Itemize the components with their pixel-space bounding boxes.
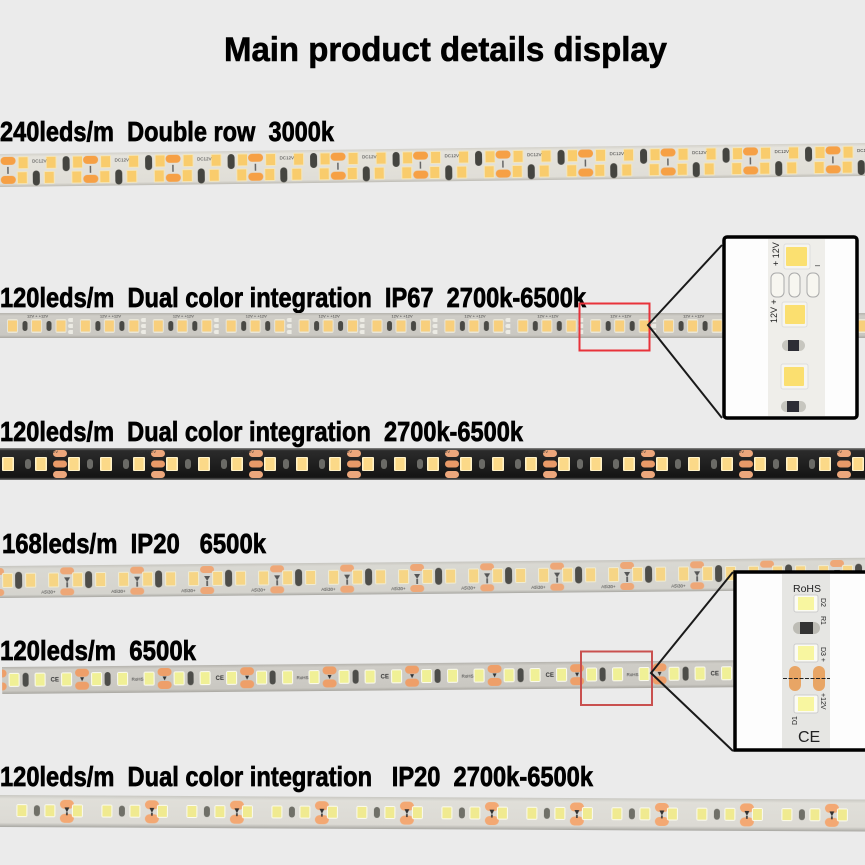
cut line <box>783 678 830 680</box>
callout strip body <box>782 574 830 748</box>
callout label D2: D2 <box>819 598 826 607</box>
strip: 120leds/m IP67 <box>0 313 865 338</box>
callout label D3: D3 + <box>819 647 826 662</box>
strip: 240leds/m double row <box>0 143 865 187</box>
callout solder pads <box>771 273 819 297</box>
callout LED 3 <box>781 364 808 389</box>
label: 120leds/m IP20 strip: 120leds/m Dual color integration IP20 2700k-6500k <box>0 761 594 792</box>
callout LED D3 <box>794 644 818 662</box>
callout resistor 2 <box>781 401 806 412</box>
arrow lines: callout 1 <box>648 245 722 418</box>
callout minus signs: – <box>815 260 820 270</box>
strip: 120leds/m 6500k <box>2 660 802 694</box>
strip: 120leds/m IP20 dual colour <box>0 795 865 832</box>
arrow lines: callout 2 <box>651 572 733 751</box>
callout LED D2 <box>794 595 818 612</box>
label: 240leds/m strip: 240leds/m Double row 3000k <box>0 116 335 147</box>
callout resistor 1 <box>782 340 805 351</box>
label: 120leds/m IP67 strip: 120leds/m Dual color integration IP67 2700k-6500k <box>0 282 587 313</box>
callout: zoom of 12V strip <box>724 237 857 418</box>
callout resistor R1 <box>793 622 820 634</box>
red highlight box 2 <box>581 652 652 705</box>
callout LED D1 <box>794 695 818 713</box>
callout strip body <box>768 239 825 416</box>
callout strip label bottom: 12V + <box>769 299 779 323</box>
callout label R1: R1 <box>819 616 826 625</box>
callout label +12V: +12V <box>819 693 826 710</box>
label: 120leds/m 6500k strip: 120leds/m 6500k <box>0 635 197 666</box>
RoHS text: RoHS <box>793 583 821 595</box>
callout LED 1 <box>784 244 810 269</box>
strip: 168leds/m IP20 <box>0 558 865 598</box>
callout LED 2 <box>782 302 807 327</box>
callout strip label top: + 12V <box>771 242 781 266</box>
label: 120leds/m black strip: 120leds/m Dual color integration 2700k-6500k <box>0 416 524 447</box>
callout: zoom of RoHS strip <box>735 572 865 750</box>
title: Main product details display <box>224 31 667 69</box>
CE mark: CE <box>798 729 820 746</box>
callout label D1: D1 <box>792 716 799 725</box>
callout solder pads <box>789 666 825 691</box>
label: 168leds/m strip: 168leds/m IP20 6500k <box>2 528 267 559</box>
red highlight box 1 <box>580 304 650 350</box>
strip: black PCB 120leds/m <box>0 448 865 480</box>
